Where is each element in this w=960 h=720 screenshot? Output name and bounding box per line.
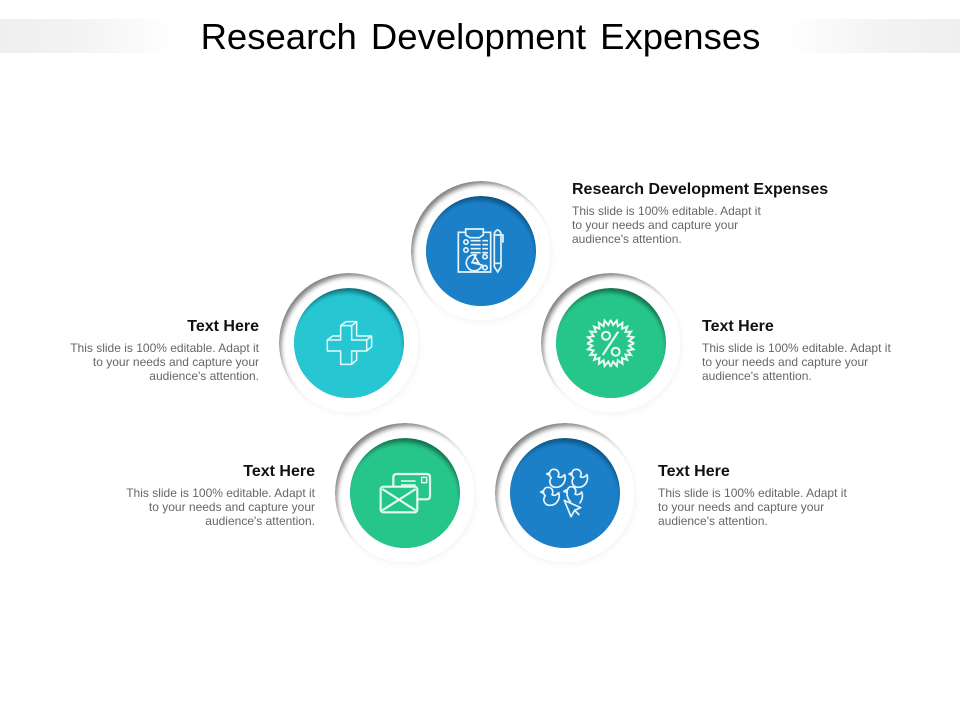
icon: envelopes <box>381 474 430 512</box>
text block: Research Development Expenses: This slide is 100% editable. Adapt it <box>572 204 761 218</box>
circle: right green <box>541 273 687 420</box>
circle: top blue <box>411 181 557 328</box>
text block: bottom left Text Here: to your needs and capture your <box>149 500 315 514</box>
icon: 3D plus <box>327 322 372 364</box>
title: Research Development Expenses <box>201 16 760 57</box>
text block: Research Development Expenses: Research Development Expenses <box>572 181 828 198</box>
icon: ducks and cursor <box>541 469 588 517</box>
text block: right Text Here: audience's attention. <box>702 369 812 383</box>
text block: bottom right Text Here: Text Here <box>658 463 730 480</box>
icon: percent badge <box>587 320 634 367</box>
text block: Research Development Expenses <box>572 181 828 246</box>
text block: right Text Here: Text Here <box>702 318 774 335</box>
circle: bottom right blue <box>495 423 641 570</box>
text block: left Text Here: to your needs and capture your <box>93 355 259 369</box>
text block: left Text Here: This slide is 100% editable. Adapt it <box>70 341 259 355</box>
text block: bottom right Text Here: audience's attention. <box>658 514 768 528</box>
text block: left Text Here: Text Here <box>187 318 259 335</box>
text block: Research Development Expenses: audience's attention. <box>572 232 682 246</box>
text block: bottom left Text Here: audience's attention. <box>205 514 315 528</box>
circle: bottom left green <box>335 423 481 570</box>
text block: Research Development Expenses: to your needs and capture your <box>572 218 738 232</box>
text block: bottom right Text Here <box>658 463 847 528</box>
circles and icons diagram <box>279 181 681 563</box>
text block: right Text Here: to your needs and capture your <box>702 355 868 369</box>
text block: bottom left Text Here: Text Here <box>243 463 315 480</box>
header band right <box>785 19 960 53</box>
text block: right Text Here: This slide is 100% editable. Adapt it <box>702 341 891 355</box>
text block: bottom left Text Here <box>126 463 315 528</box>
circle: left teal <box>279 273 425 420</box>
text block: right Text Here <box>702 318 891 383</box>
text block: left Text Here <box>70 318 259 383</box>
header band left <box>0 19 175 53</box>
text block: bottom right Text Here: This slide is 100% editable. Adapt it <box>658 486 847 500</box>
text block: left Text Here: audience's attention. <box>149 369 259 383</box>
text block: bottom left Text Here: This slide is 100% editable. Adapt it <box>126 486 315 500</box>
icon: clipboard with pen <box>458 229 503 272</box>
text block: bottom right Text Here: to your needs and capture your <box>658 500 824 514</box>
